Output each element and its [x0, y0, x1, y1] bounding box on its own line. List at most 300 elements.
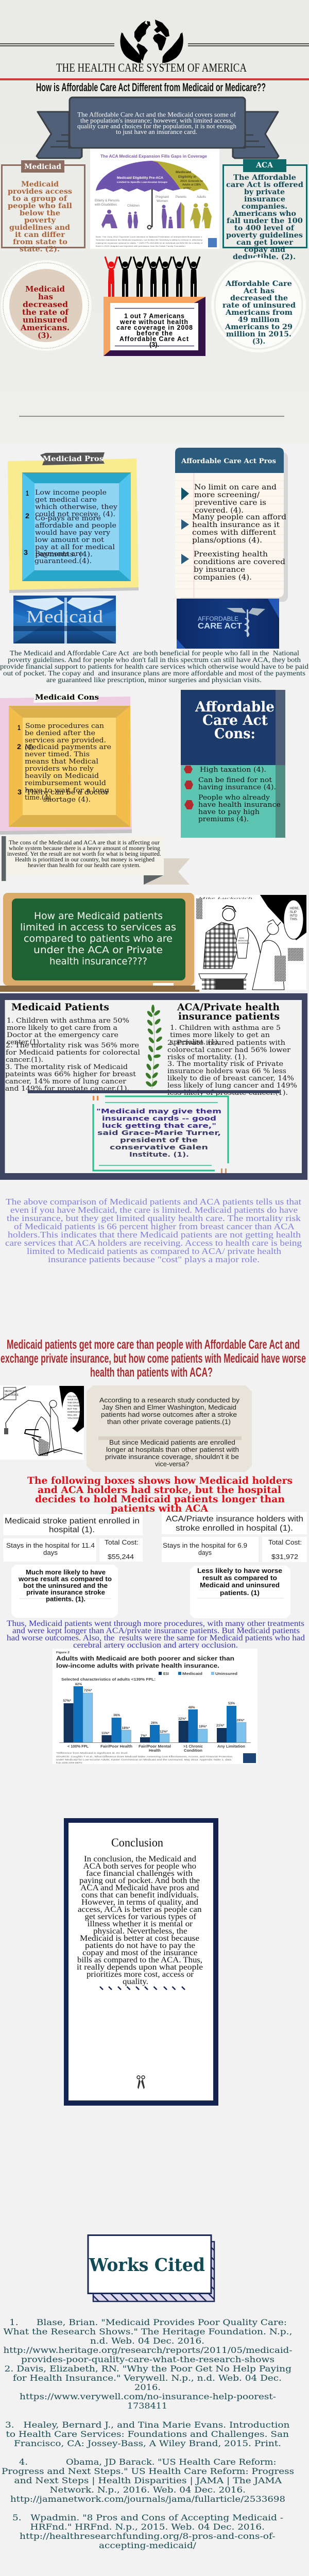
chart legend: Selected characteristics of adults <139% FPL: [61, 1678, 156, 1682]
Medicaid cons list: shortage (4). [43, 796, 91, 804]
ACA description text: to 400 level of [234, 224, 295, 232]
heading: following boxes [27, 1475, 293, 1514]
image: Affordable Care Act caduceus: CARE ACT [198, 622, 242, 631]
callout: 1 out of 7 Americans [104, 297, 205, 356]
panel: Medicaid stroke patient: $55,244 [108, 1553, 134, 1561]
callout: 1 out of 7 Americans: care coverage in 2008 [116, 324, 193, 331]
Medicaid cons list: Some procedures can [25, 722, 105, 730]
bar chart: adults with Medicaid [53, 1649, 258, 1764]
bar chart: adults with Medicaid: 82% [75, 1683, 82, 1686]
cartoon: nurse and old man [195, 895, 306, 990]
quote box: luck getting that care," [102, 1122, 216, 1129]
ACA patients list: less likely of prostate cancer.(1). [167, 1089, 288, 1097]
circle: ACA uninsured rate: Affordable Care [225, 280, 292, 288]
text block: references: 1. Blase, Brian. "Medicaid Provides Poor Quality Care: [9, 2318, 287, 2327]
Medicaid pros list: payments. (4). [35, 551, 93, 558]
chalkboard: access question: compared to patients who are [24, 933, 173, 944]
panel: Medicaid stroke patient: days [43, 1549, 58, 1556]
text block: outcomes conclusion: cerebral artery occlusion and artery occlusion. [73, 1641, 238, 1650]
text block: comparison takeaway: of Medicaid patients is 66 percent higher from breast cancer than ACA [14, 1222, 295, 1231]
circle: Medicaid uninsured rate [1, 260, 92, 351]
conclusion text: get services for various types of [84, 1912, 197, 1921]
Medicaid cons list: There can be a doctor [26, 789, 109, 796]
Medicaid patients list: 2. The mortality risk was 56% more [6, 1042, 139, 1049]
circle: Medicaid uninsured rate: uninsured [23, 316, 67, 325]
panel: Medicaid stroke patient [3, 1514, 143, 1618]
bar chart: adults with Medicaid: 7%* [141, 1734, 147, 1738]
cartoon: doctor and patient on hill: EMERGENCY [67, 1411, 82, 1413]
ACA pros list: by insurance [194, 566, 245, 574]
quote box: conservative Galen [110, 1143, 208, 1151]
image: Affordable Care Act caduceus [177, 599, 279, 649]
chalkboard: access question: health insurance???? [49, 956, 147, 967]
circle: ACA uninsured rate: Americans from [225, 309, 293, 317]
heading: Medicaid cons [33, 691, 99, 703]
ACA description text: fall under the 100 [227, 217, 303, 225]
text block: comparison takeaway: the insurance, but they get limited quality health care. The mortality risk [7, 1213, 301, 1223]
quote box: insurance cards -- good [102, 1114, 216, 1122]
conclusion text: it really depends upon what people [77, 1963, 203, 1972]
cartoon: nurse and old man: Mike Luckovich [197, 897, 253, 900]
heading: ACA cons: Care Act [202, 713, 268, 728]
panel: Medicaid stroke patient: Medicaid stroke patient enrolled in [5, 1517, 140, 1526]
ACA pros list: comes with different [192, 529, 276, 537]
Medicaid patients list [5, 1017, 140, 1093]
panel: ACA pros [175, 448, 288, 602]
image: Affordable Care Act caduceus: AFFORDABLE [198, 615, 238, 622]
panel: Medicaid stroke patient: Stays in the hospital for 11.4 [6, 1541, 95, 1549]
quote box: president of the [120, 1136, 198, 1144]
bar chart: adults with Medicaid: 18%* [122, 1726, 130, 1730]
Medicaid cons list: means that Medical [25, 758, 98, 766]
conclusion text: prioritizes more cost, access or [87, 1970, 194, 1979]
circle: Medicaid uninsured rate: the rate of [22, 308, 70, 317]
cartoon: doctor and patient on hill [0, 1385, 84, 1460]
circle: ACA uninsured rate: (3). [252, 337, 265, 346]
callout: cons summary ribbon: Health is prioritized in our country, but money is weighed [15, 857, 154, 863]
chalkboard: access question: How are Medicaid patients [34, 910, 163, 922]
text block: references [2, 2318, 294, 2550]
ACA cons list: have health insurance [198, 801, 281, 809]
cartoon: doctor and patient on hill: MEDICAID [5, 1390, 18, 1393]
chart legend: Medicaid [182, 1672, 202, 1676]
Medicaid description text: guidelines and [9, 224, 71, 232]
quote box: Institute. (1). [129, 1150, 189, 1158]
panel: ACA box: ACA [255, 161, 273, 170]
bar chart: adults with Medicaid: 48% [188, 1706, 195, 1709]
icon: seven people, one in red [105, 257, 200, 297]
Medicaid cons list: Medicaid payments are [25, 743, 111, 751]
ACA pros list: conditions are covered [194, 558, 285, 566]
outcome box: Medicaid: patients. (1). [46, 1595, 85, 1603]
ACA patients list: 3. The mortality risk of Private [167, 1060, 283, 1068]
conclusion text: physical. Nevertheless, the [93, 1927, 187, 1936]
outcome box: ACA [190, 1566, 290, 1618]
Medicaid patients list: pateints was 66% higher for breast [5, 1071, 136, 1078]
panel: Medicaid cons: 2 [17, 742, 21, 751]
Medicaid cons list: have to wait for a long [25, 787, 109, 794]
heading: Medicaid cons: Medicaid Cons [35, 693, 99, 702]
Medicaid pros list: could not receive. (4). [35, 511, 115, 518]
bar chart: adults with Medicaid: Health [149, 1749, 161, 1753]
ACA cons list: have to pay high [198, 808, 260, 816]
Medicaid description text [8, 180, 72, 253]
Medicaid cons list: never timed. This [25, 751, 90, 758]
heading: following boxes: and ACA holders had stroke, but the hospital [38, 1484, 281, 1496]
ACA patients list: risks of mortality. (1). [167, 1054, 247, 1061]
ACA pros list: health insurance as it [192, 521, 280, 529]
Medicaid description text: state. (2). [20, 245, 60, 253]
bar chart: adults with Medicaid: 57%* [63, 1699, 72, 1703]
Medicaid cons list: time.(4). [25, 794, 53, 802]
quote box: "Medicaid may give them [96, 1107, 221, 1115]
chart: umbrella coverage image: Limited to Specific Low-Income Groups [117, 181, 167, 184]
text block: references: 2016. [134, 2383, 161, 2392]
chalkboard: access question [0, 893, 199, 992]
ACA cons list [198, 766, 281, 823]
Medicaid pros list: Low income people [35, 489, 107, 497]
image: Medicaid caduceus [13, 596, 116, 643]
bar chart: adults with Medicaid: 53% [228, 1702, 235, 1705]
panel: ACA stroke patient: days [198, 1549, 212, 1556]
text block: outcomes conclusion [7, 1619, 305, 1650]
Medicaid description text: it can differ [15, 231, 65, 239]
heading: following boxes: The following boxes shows how Medicaid holders [27, 1475, 293, 1486]
cartoon: nurse and old man: COVERAGE [238, 942, 250, 944]
text block: references: Progress and Next Steps." US Health Care Reform: Progress [2, 2467, 294, 2476]
Medicaid description text: to a group of [12, 195, 67, 203]
outcome box: Medicaid [11, 1565, 118, 1618]
ACA cons list: Can be fined for not [198, 776, 272, 784]
Medicaid patients list: for Medicaid patients for colorectal [6, 1049, 140, 1057]
cartoon: nurse and old man: INTO [290, 914, 298, 918]
chart: umbrella coverage image: Note: The June 2012 Supreme Court decision in National Federation of Independent Businesses v. [96, 235, 202, 238]
ACA pros list: No limit on care and [194, 483, 277, 492]
cartoon: doctor and patient on hill: YOU GOOD. [67, 1417, 81, 1419]
text block: references: n.d. Web. 04 Dec. 2016. [90, 2336, 204, 2346]
panel: conclusion: Conclusion [111, 1836, 163, 1849]
chart: umbrella coverage image: Children [127, 205, 140, 208]
text block: references: http://healthresearchfunding.org/8-pros-and-cons-of- [20, 2532, 275, 2541]
text block: references: What the Research Shows." The Heritage Foundation. N.p., [3, 2327, 293, 2336]
text block: references: 3. Healey, Bernard J., and Tina Marie Evans. Introduction [5, 2420, 290, 2430]
circle: ACA uninsured rate: million in 2015. [226, 330, 291, 338]
panel: research study: longer at hospitals than other patienst with [106, 1446, 239, 1453]
Medicaid cons list: services are provided. [25, 737, 106, 744]
header: double rules [0, 43, 309, 46]
cartoon: doctor and patient on hill: YOU NEED... [67, 1404, 81, 1407]
ribbon heading: Medicaid pros [40, 452, 105, 465]
text block: comparison takeaway: insurance patients because "cost" plays a major role. [48, 1255, 260, 1264]
panel: ACA stroke patient: stroke enrolled in hospital (1). [176, 1524, 293, 1533]
quote box [93, 1096, 228, 1173]
panel: Medicaid cons [0, 691, 132, 835]
panel: ACA stroke patient: ACA/Priavte insurance holders with [166, 1515, 303, 1523]
Medicaid description text: below the [20, 209, 60, 217]
bar chart: adults with Medicaid: Fair/Poor Mental [139, 1745, 171, 1749]
text block: summary of benefits [0, 650, 308, 684]
icon: scissors [137, 2076, 145, 2089]
outcome box: ACA: Medicaid and uninsured [200, 1581, 280, 1589]
outcome box: ACA: Less likely to have worse [197, 1567, 282, 1574]
chart: umbrella coverage image: making the expansion optional for states. * 138% FPL=$15,856 for an individual and $26,951 for a family of [96, 242, 203, 244]
Medicaid cons list: heavily on Medicaid [25, 772, 99, 780]
heading box: works cited: Works Cited [89, 2255, 205, 2276]
panel: research study: than other private coverage patients.(1) [107, 1418, 231, 1426]
chart: umbrella coverage image [90, 149, 219, 249]
column heading: ACA patients: ACA/Private health [177, 1002, 280, 1013]
Medicaid patients list: Doctor at the emergency care [7, 1031, 118, 1039]
callout: 1 out of 7 Americans: (3). [149, 341, 159, 348]
cartoon: doctor and patient on hill: HAVE GOT [67, 1398, 79, 1401]
cartoon: doctor and patient on hill: BUT THE [67, 1408, 77, 1410]
ACA description text [226, 174, 304, 261]
conclusion text: copay and most of the insurance [82, 1948, 198, 1957]
circle: ACA uninsured rate [211, 258, 306, 352]
ACA pros list: plans/options (4). [192, 536, 262, 545]
Medicaid description text: people who fall [8, 202, 72, 210]
outcome box: Medicaid: bot the uninsured and the [23, 1582, 108, 1589]
heading: worse health question [1, 1337, 306, 1380]
ACA description text: Americans who [232, 210, 296, 218]
chart: umbrella coverage image: Elderly & Persons [95, 199, 119, 202]
panel: research study: private insurance coverage, shouldn't it be [105, 1453, 239, 1461]
ACA patients list: times more likely to get an [170, 1031, 270, 1039]
cartoon: nurse and old man: HERE, [290, 907, 300, 910]
callout: 1 out of 7 Americans: were without health [119, 318, 188, 326]
chart: umbrella coverage image: The ACA Medicaid Expansion Fills Gaps in Coverage [100, 154, 207, 159]
quote box: said Grace-Marie Turner, [97, 1129, 221, 1137]
bar chart: adults with Medicaid: under Medicaid for Low-Income Adults, Kaiser Commission on Medicaid and the Uninsured, May 2013. Appendix Table 1, data [56, 1758, 232, 1761]
bar chart: adults with Medicaid: SOURCE: Coughlin T et al., What Difference Does Medicaid Make: Assessing Cost Effectiveness, Access, and Financial Protection [56, 1755, 233, 1758]
outcome box: Medicaid: Much more likely to have [26, 1568, 106, 1576]
image: Medicaid caduceus: Medicaid [26, 607, 103, 626]
outcome box: Medicaid: private insurance stroke [26, 1588, 105, 1596]
ACA cons list: People who already [198, 794, 270, 802]
text block: summary of benefits: provide financial support to patients for health care services which otherwise would have to be paid [0, 663, 308, 671]
heading: ACA cons: Cons: [214, 726, 255, 742]
callout: 1 out of 7 Americans: Affordable Care Act [119, 335, 189, 343]
ACA patients list [167, 1024, 297, 1097]
conclusion text: bills as compared to the ACA. Thus, [77, 1956, 202, 1964]
circle: ACA uninsured rate: rate of uninsured [222, 301, 296, 310]
bar chart: adults with Medicaid: Condition [184, 1749, 202, 1753]
column heading: ACA patients: insurance patients [178, 1011, 280, 1022]
conclusion text: face financial challenges with [86, 1869, 193, 1878]
bar chart: adults with Medicaid: low-income adults with private health insurance. [56, 1662, 219, 1669]
outcome box: ACA: patients. (1) [220, 1589, 260, 1597]
Medicaid pros list: pay at all for medical [35, 544, 115, 551]
ACA description text: companies. [242, 202, 287, 211]
icon: globe in hands [120, 20, 183, 63]
Medicaid description text: provides access [8, 188, 72, 196]
bar chart: adults with Medicaid: Adults with Medicaid are both poorer and sicker than [56, 1655, 234, 1662]
bar chart: adults with Medicaid: 32%* [178, 1717, 186, 1721]
circle: ACA uninsured rate: 49 million [238, 316, 280, 324]
cartoon: nurse and old man: 100% [239, 937, 245, 939]
panel: research study: But since Medicaid patients are enrolled [109, 1438, 235, 1446]
text block: references: HRFnd." HRFnd. N.p., 2015. Web. 04 Dec. 2016. [30, 2522, 265, 2532]
circle: Medicaid uninsured rate: has [38, 293, 53, 301]
ACA description text: poverty guidelines [226, 231, 303, 240]
text block: references: Network. N.p., 2016. Web. 04 Dec. 2016. [49, 2485, 246, 2495]
banner text: quality care and choices for the population, it is not enough [77, 123, 237, 130]
Medicaid patients list: cancer.(1). [6, 1056, 43, 1064]
ACA patients list: less likely of lung cancer and 149% [167, 1082, 297, 1090]
chart: umbrella coverage image: Parents [176, 196, 186, 199]
callout: cons summary ribbon: whole system because there is a heavy amount of money being [9, 845, 160, 852]
panel: Medicaid box [2, 160, 84, 253]
conclusion text: access, ACA is better as people can [78, 1905, 202, 1914]
conclusion text: Medicaid is better at cost because [80, 1934, 199, 1943]
text block: references: http://www.heritage.org/research/reports/2011/05/medicaid- [3, 2346, 293, 2355]
Medicaid patients list: cancer, 14% more of lung cancer [5, 1078, 127, 1086]
Medicaid pros list [35, 489, 118, 565]
text block: references: 1738411 [127, 2401, 167, 2411]
ACA description text: can get lower [236, 239, 294, 247]
ACA description text: copay and [244, 246, 286, 254]
banner text: the population's insurance; however, with limited access, [80, 117, 233, 124]
ACA patients list: specialist. (1). [170, 1039, 220, 1046]
panel: Medicaid box: Mediciad [24, 163, 61, 171]
bar chart: adults with Medicaid: Figure 2 [56, 1651, 70, 1654]
column heading: Medicaid patients: Medicaid Patients [11, 1002, 109, 1013]
ACA patients list: colorectal cancer had 56% lower [167, 1046, 291, 1054]
chart: umbrella coverage image: 2014: Extends to [180, 180, 203, 183]
chart legend: ESI [163, 1672, 169, 1676]
conclusion text: paying out of pocket. And both the [79, 1876, 200, 1885]
chart: umbrella coverage image: Medicaid [176, 171, 191, 174]
text block: comparison takeaway: holders.This indicates that there Medicaid patients are not getting health [8, 1230, 301, 1240]
bar chart: adults with Medicaid: Any Limitation [217, 1745, 245, 1749]
chart legend: Uninsured [215, 1672, 237, 1676]
ACA patients list: 2. Private insured patients with [167, 1039, 286, 1047]
panel: research study: According to a research study conducted by [99, 1396, 240, 1404]
cartoon: doctor and patient on hill: YOU MAY [67, 1395, 78, 1398]
column heading: ACA patients [177, 1002, 280, 1022]
ACA pros list: companies (4). [194, 573, 252, 582]
callout: 1 out of 7 Americans: 1 out 7 Americans [124, 313, 184, 320]
Medicaid pros list: guaranteed.(4). [35, 557, 92, 565]
circle: Medicaid uninsured rate: Americans. [20, 324, 70, 332]
banner ribbon [37, 97, 279, 158]
chart: umbrella coverage image: Sebelius maintained the Medicaid expansion, but limited the Secretary's ability to enforce it, effectively [96, 239, 202, 241]
text block: references: 2. Davis, Elizabeth, RN. "Why the Poor Get No Help Paying [4, 2364, 291, 2374]
circle: ACA uninsured rate: Act has [243, 287, 274, 295]
chart: umbrella coverage image: three in 2013. Adapted and reprinted with permission from the Kaiser Family Foundation. [96, 245, 186, 247]
banner text: to just have an insurance card. [116, 128, 197, 135]
bar chart: adults with Medicaid: from 2005-2009 MEPS. [56, 1761, 83, 1764]
text block: comparison takeaway [5, 1197, 302, 1264]
bar chart: adults with Medicaid: 19%* [199, 1725, 207, 1728]
Medicaid description text: poverty [24, 216, 56, 225]
panel: ACA cons [181, 690, 285, 838]
panel: Medicaid pros [8, 452, 139, 593]
circle: ACA uninsured rate: decreased the [230, 294, 288, 302]
Medicaid cons list: reimbursement would [25, 779, 106, 787]
text block: references: 5. Wpadmin. "8 Pros and Cons of Accepting Medicaid - [12, 2513, 283, 2522]
panel: Medicaid pros: 1 [26, 489, 29, 497]
heading: following boxes: decides to hold Medicaid patients longer than [35, 1494, 285, 1505]
Medicaid patients list: 1. Children with asthma are 50% [7, 1017, 129, 1025]
Medicaid description text: from state to [13, 238, 67, 246]
panel: research study: patients had worse outcomes after a stroke [101, 1411, 237, 1418]
ACA description text: deductible. (2). [233, 253, 296, 261]
callout: cons summary ribbon: The cons of the Medicaid and ACA are that it is affecting our [9, 840, 160, 846]
Medicaid cons list: providers who rely [25, 765, 94, 773]
text block: references: http://jamanetwork.com/journals/jama/fullarticle/2533698 [10, 2495, 285, 2504]
panel: ACA stroke patient: $31,972 [271, 1553, 298, 1561]
Medicaid description text: Medicaid [21, 180, 59, 189]
bar chart: adults with Medicaid: 12%* [160, 1730, 168, 1734]
Medicaid cons list: be denied after the [25, 730, 95, 737]
ACA description text: insurance [244, 195, 285, 204]
bar chart: adults with Medicaid: 72%* [84, 1689, 92, 1692]
text block: outcomes conclusion: had worse outcomes. Also, the results were the same for Medicaid patients who had [7, 1634, 305, 1642]
bar chart: adults with Medicaid: 26% [151, 1721, 158, 1725]
circle: Medicaid uninsured rate: Medicaid [25, 285, 65, 294]
chart: umbrella coverage image: of FPL* [183, 187, 191, 190]
Medicaid patients list: 3. The mortality risk of Medicaid [5, 1063, 128, 1071]
panel: ACA box [224, 159, 307, 261]
ACA patients list: insurance holders was 66 % less [167, 1067, 286, 1075]
ACA cons list: premiums (4). [198, 816, 249, 823]
text block: references: https://www.verywell.com/no-insurance-help-poorest- [20, 2392, 276, 2401]
panel: conclusion [64, 1818, 218, 2106]
red divider [0, 78, 309, 80]
text block: outcomes conclusion: Thus, Medicaid patients went through more procedures, with many other treatments [7, 1619, 304, 1628]
chart legend [61, 1672, 237, 1682]
text block: comparison takeaway: The above comparison of Medicaid patients and ACA patients tells us that [6, 1197, 301, 1207]
cartoon: doctor and patient on hill: IN STROKE [5, 1394, 19, 1397]
banner text: The Affordable Care Act and the Medicaid covers some of [77, 111, 236, 118]
text block: summary of benefits: are guaranteed like prescription, minor surgeries and physician visits. [46, 676, 262, 684]
ACA description text: The Affordable [233, 174, 296, 182]
text block: summary of benefits: poverty guidelines. And for people who don't fall in this spectrum can still have ACA, they both [8, 656, 301, 664]
Medicaid pros list: which otherwise, they [35, 503, 118, 511]
ACA patients list: likely to die of breast cancer, 14% [167, 1075, 294, 1082]
ribbon heading: Medicaid pros: Mediciad Pros [43, 455, 104, 463]
chart: umbrella coverage image: Medicaid Eligibility Pre-ACA [117, 177, 164, 180]
text block: outcomes conclusion: and were kept longer than ACA/private insurance patients. But Medicaid patients [12, 1626, 300, 1635]
bar chart: adults with Medicaid: < 100% FPL [67, 1745, 89, 1749]
panel: Medicaid pros: 2 [25, 512, 29, 520]
ACA pros list: Preexisting health [194, 550, 268, 558]
bar chart: adults with Medicaid: 36% [113, 1714, 120, 1717]
text block: summary of benefits: The Medicaid and Affordable Care Act are both beneficial for people who fall in the National [10, 650, 299, 657]
icon: laurel branch [145, 1005, 163, 1089]
ACA cons list: High taxation (4). [200, 766, 266, 774]
Medicaid cons list [25, 722, 111, 804]
conclusion text: quality. [123, 1977, 148, 1986]
panel: research study: vice-versa? [155, 1460, 189, 1468]
chart: umbrella coverage image: Eligibility in [178, 176, 196, 179]
conclusion text: ACA and Medicaid have pros and [80, 1884, 199, 1892]
text block: references: Francisco, CA: Jossey-Bass, A Wiley Brand, 2015. Print. [14, 2439, 281, 2448]
conclusion text: patients do not have to pay the [85, 1941, 195, 1950]
cartoon: nurse and old man: MEDICAID [238, 939, 248, 942]
Medicaid cons list: (4). [25, 744, 35, 752]
banner text [77, 111, 237, 135]
callout: cons summary ribbon [2, 836, 190, 885]
chalkboard: access question: limited in access to services as [20, 922, 176, 933]
panel: Medicaid cons: 3 [18, 788, 22, 796]
bar chart: adults with Medicaid: 21%* [216, 1724, 225, 1727]
title: THE HEALTH CARE SYSTEM OF AMERICA [56, 61, 247, 74]
Medicaid pros list: get medical care [35, 496, 97, 504]
circle: Medicaid uninsured rate: (3). [38, 331, 52, 340]
conclusion text: In conclusion, the Medicaid and [84, 1855, 196, 1863]
